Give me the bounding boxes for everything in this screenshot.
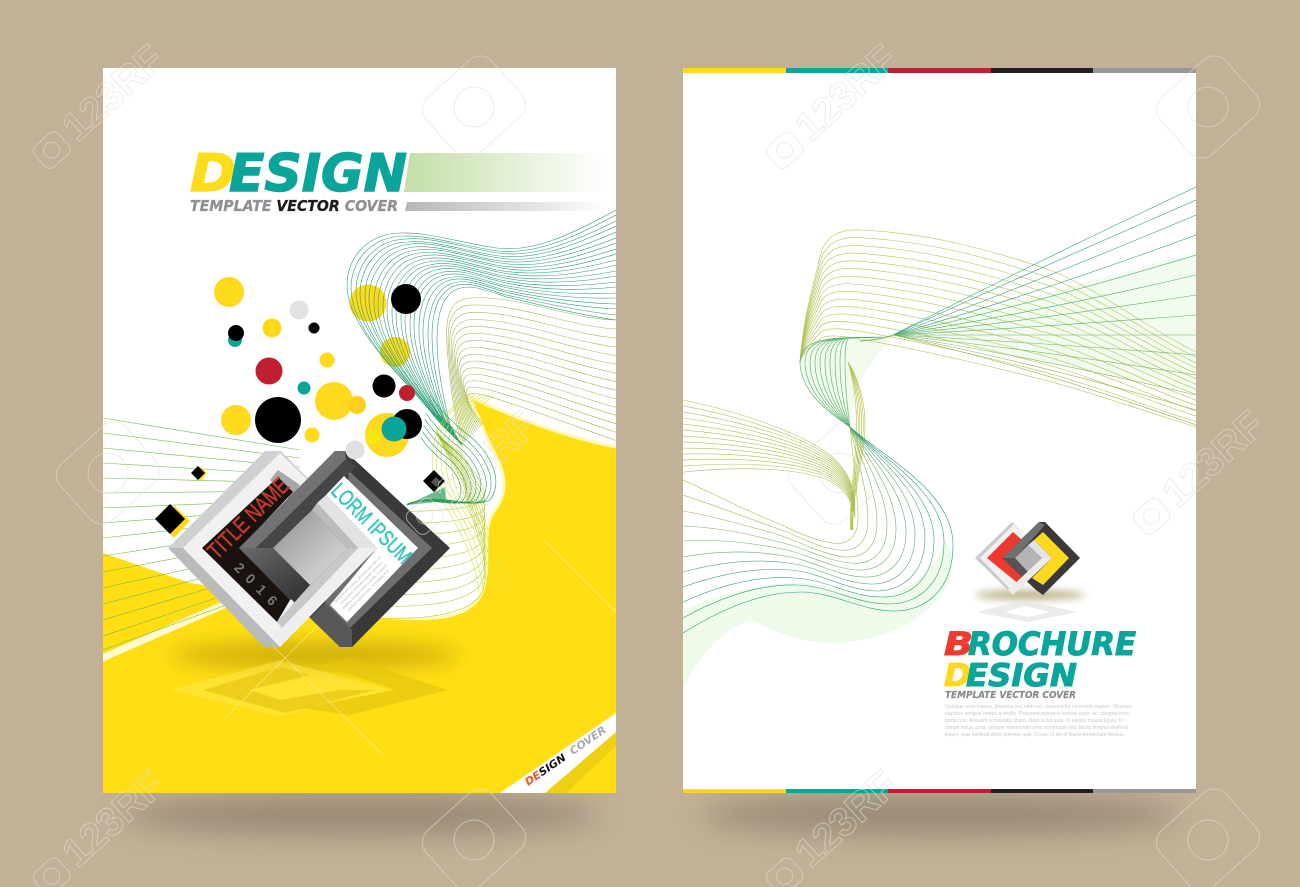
wave lines: lower left olive band — [683, 400, 855, 572]
panel small text: consectetur venenatis sapien. Vivamus — [339, 561, 384, 605]
logo reflection — [977, 600, 1077, 622]
left page shadow — [120, 795, 600, 835]
paragraph: dapibus congue metus a mollis. Praesent posuere laoreet justo, ac volutpat eros — [945, 711, 1129, 717]
watermark: text middle right: 123RF — [1154, 403, 1273, 516]
bottom colour strip — [683, 789, 1196, 793]
title panel — [202, 472, 294, 622]
panel small text: dapibus congue metus a mollis. Praesent — [341, 563, 388, 610]
logo shadow — [975, 590, 1085, 600]
panel small text: posuere laoreet justo, ac volutpat eros — [346, 568, 390, 612]
paragraph: ipsum, quis eleifend dolor pulvinar quis. Donec id elit et libero fermentum ferreus. — [945, 732, 1125, 738]
title name text: TITLE NAME — [202, 472, 294, 564]
thin light lines on yellow — [223, 540, 616, 755]
wave lines: right parallel band — [446, 298, 616, 444]
green pinch wedge — [407, 487, 446, 505]
3D squares illustration — [168, 440, 450, 647]
watermark: text top left: 123RF — [54, 37, 173, 150]
paragraph: Quisque urna massa, pharetra sed nibh vel, consectetur venenatis sapien. Vivamus — [945, 704, 1132, 710]
corner ribbon — [500, 713, 616, 793]
heading: brochure: B — [944, 625, 973, 663]
subheading: TEMPLATE VECTOR COVER — [945, 690, 1076, 701]
watermark: text middle left: 123RF — [427, 403, 546, 516]
yellow dots behind wave — [350, 284, 410, 367]
wave lines: top loop — [347, 210, 616, 445]
watermark: text top right: 123RF — [787, 37, 906, 150]
heading: design: D — [944, 658, 971, 694]
top colour strip — [683, 68, 1196, 73]
floor reflection — [170, 658, 448, 716]
subtitle bar — [405, 202, 584, 211]
headline: DESIGN: ESIGN — [229, 144, 407, 204]
year text: 2016 — [231, 559, 281, 609]
watermark: text top right — [757, 37, 906, 177]
wave lines: upper green fan — [860, 187, 1196, 425]
watermark: text top left — [24, 37, 173, 177]
small black diamonds — [155, 466, 445, 538]
wave lines: green pinch loop — [407, 395, 496, 505]
headline bar — [404, 153, 607, 192]
dark square frame — [239, 451, 450, 647]
panel: right cover page — [683, 68, 1200, 793]
yellow background shape — [103, 397, 616, 793]
paragraph — [945, 704, 1132, 738]
subtitle: template vector cover: TEMPLATE VECTOR COVER — [190, 197, 398, 215]
yellow panel — [1032, 532, 1069, 585]
pale yellow edge — [380, 397, 616, 619]
wave lines: lower band — [380, 430, 486, 619]
paragraph: porta non. Aliquam a molestie libero. Nam a dui ante. In iaculis massa ligula. In — [945, 718, 1123, 724]
wave lines: upper olive band — [800, 230, 1200, 430]
wave lines: olive neck strand — [848, 362, 865, 530]
watermark: text middle left — [397, 403, 546, 543]
pale green haze lower — [683, 540, 952, 690]
top grey dot — [346, 440, 364, 460]
pale green haze upper — [900, 252, 1196, 392]
lorm ipsum text: LORM IPSUM — [326, 478, 417, 569]
white lower-right arm — [272, 548, 377, 647]
pale green haze centre — [800, 335, 895, 427]
white square base — [168, 451, 310, 647]
dots cluster — [214, 277, 422, 457]
watermark: text bottom left: 123RF — [54, 763, 173, 876]
panel: left cover page — [100, 68, 641, 793]
wave lines: big lower loop — [683, 427, 953, 633]
watermark: text middle right — [1124, 403, 1273, 543]
logo: overlapping squares — [975, 522, 1080, 595]
right page shadow — [700, 795, 1180, 835]
white diagonal stripe — [100, 603, 228, 659]
centre aperture — [273, 510, 347, 585]
paragraph: ornare lectus urna, semper elementum urna accumsan sed. Morbi tempus eleifend — [945, 725, 1128, 731]
info panel — [326, 476, 418, 622]
red panel — [987, 532, 1025, 585]
wave lines: yellow outer band — [432, 395, 508, 592]
wave lines: central neck — [800, 337, 883, 427]
floor shadow — [170, 644, 460, 666]
panel small text: Quisque urna massa, pharetra sed nibh vel — [333, 555, 382, 604]
heading: brochure: ROCHURE — [968, 625, 1136, 663]
ribbon text: DESIGNCOVER — [523, 724, 609, 788]
headline: DESIGN — [190, 152, 407, 192]
headline: DESIGN: D — [190, 144, 236, 204]
watermark: text bottom right: 123RF — [787, 763, 906, 876]
grey strip behind title panel — [270, 470, 300, 500]
heading: design: ESIGN — [966, 658, 1077, 694]
wave lines: left fan — [103, 418, 300, 650]
aperture walls — [312, 503, 358, 548]
